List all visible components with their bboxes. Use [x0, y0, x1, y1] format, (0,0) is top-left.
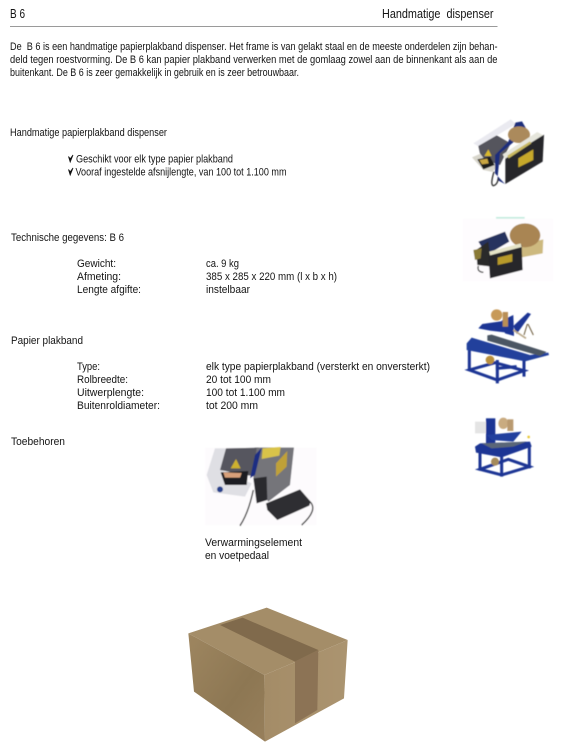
section heading: Technische gegevens: B 6 — [11, 232, 124, 244]
box top face — [188, 608, 348, 675]
specification table: Lengte afgifte: — [77, 284, 141, 296]
intro paragraph: De B 6 is een handmatige papierplakband dispenser. Het frame is van gelakt staal en de meeste onderdelen zijn behan- — [10, 41, 498, 53]
tape specification table — [77, 361, 430, 412]
tape specification table: elk type papierplakband (versterkt en onversterkt) — [206, 361, 430, 373]
section: papier plakband — [11, 335, 430, 412]
tape specification table: tot 200 mm — [206, 400, 258, 412]
specification table: Gewicht: — [77, 258, 116, 270]
intro paragraph: buitenkant. De B 6 is zeer gemakkelijk in gebruik en is zeer betrouwbaar. — [10, 67, 299, 79]
accessory caption — [205, 537, 302, 562]
specification table: 385 x 285 x 220 mm (l x b x h) — [206, 271, 337, 283]
tape specification table: Type: — [77, 361, 100, 373]
feature list: Geschikt voor elk type papier plakband — [76, 154, 233, 166]
icon: B 6 dispenser photo — [472, 119, 544, 186]
packing tape top — [220, 618, 318, 662]
intro paragraph — [10, 41, 498, 79]
tape specification table: Uitwerplengte: — [77, 387, 144, 399]
specification table: Afmeting: — [77, 271, 121, 283]
tape specification table: Buitenroldiameter: — [77, 400, 160, 412]
tape specification table: 100 tot 1.100 mm — [206, 387, 285, 399]
icon: B 6 dispenser with paper roll photo — [463, 217, 553, 282]
feature list — [68, 154, 286, 178]
section: toebehoren heading: Toebehoren — [11, 436, 65, 448]
product category title: Handmatige dispenser — [382, 7, 494, 21]
tape specification table: Rolbreedte: — [77, 374, 128, 386]
box left face — [188, 633, 265, 742]
specification table: ca. 9 kg — [206, 258, 239, 270]
specification table — [77, 258, 337, 296]
accessory caption: en voetpedaal — [205, 550, 269, 562]
section: handmatige dispenser — [10, 127, 286, 178]
section: technische gegevens — [11, 232, 337, 296]
header — [10, 7, 498, 27]
packing tape side — [295, 650, 318, 723]
specification table: instelbaar — [206, 284, 250, 296]
accessory caption: Verwarmingselement — [205, 537, 302, 549]
section heading: Papier plakband — [11, 335, 83, 347]
icon: cardboard box photo — [188, 608, 348, 742]
intro paragraph: deld tegen roestvorming. De B 6 kan papier plakband verwerken met de gomlaag zowel aan de binnenkant als aan de — [10, 54, 498, 66]
box right face — [264, 640, 348, 742]
icon: long conveyor taping machine photo — [467, 309, 549, 383]
tape specification table: 20 tot 100 mm — [206, 374, 271, 386]
model name: B 6 — [10, 7, 25, 21]
section heading: Handmatige papierplakband dispenser — [10, 127, 167, 139]
icon: heating element and foot pedal photo — [205, 447, 317, 526]
feature list: Vooraf ingestelde afsnijlengte, van 100 tot 1.100 mm — [76, 166, 286, 178]
icon: compact taping machine photo — [475, 418, 532, 477]
